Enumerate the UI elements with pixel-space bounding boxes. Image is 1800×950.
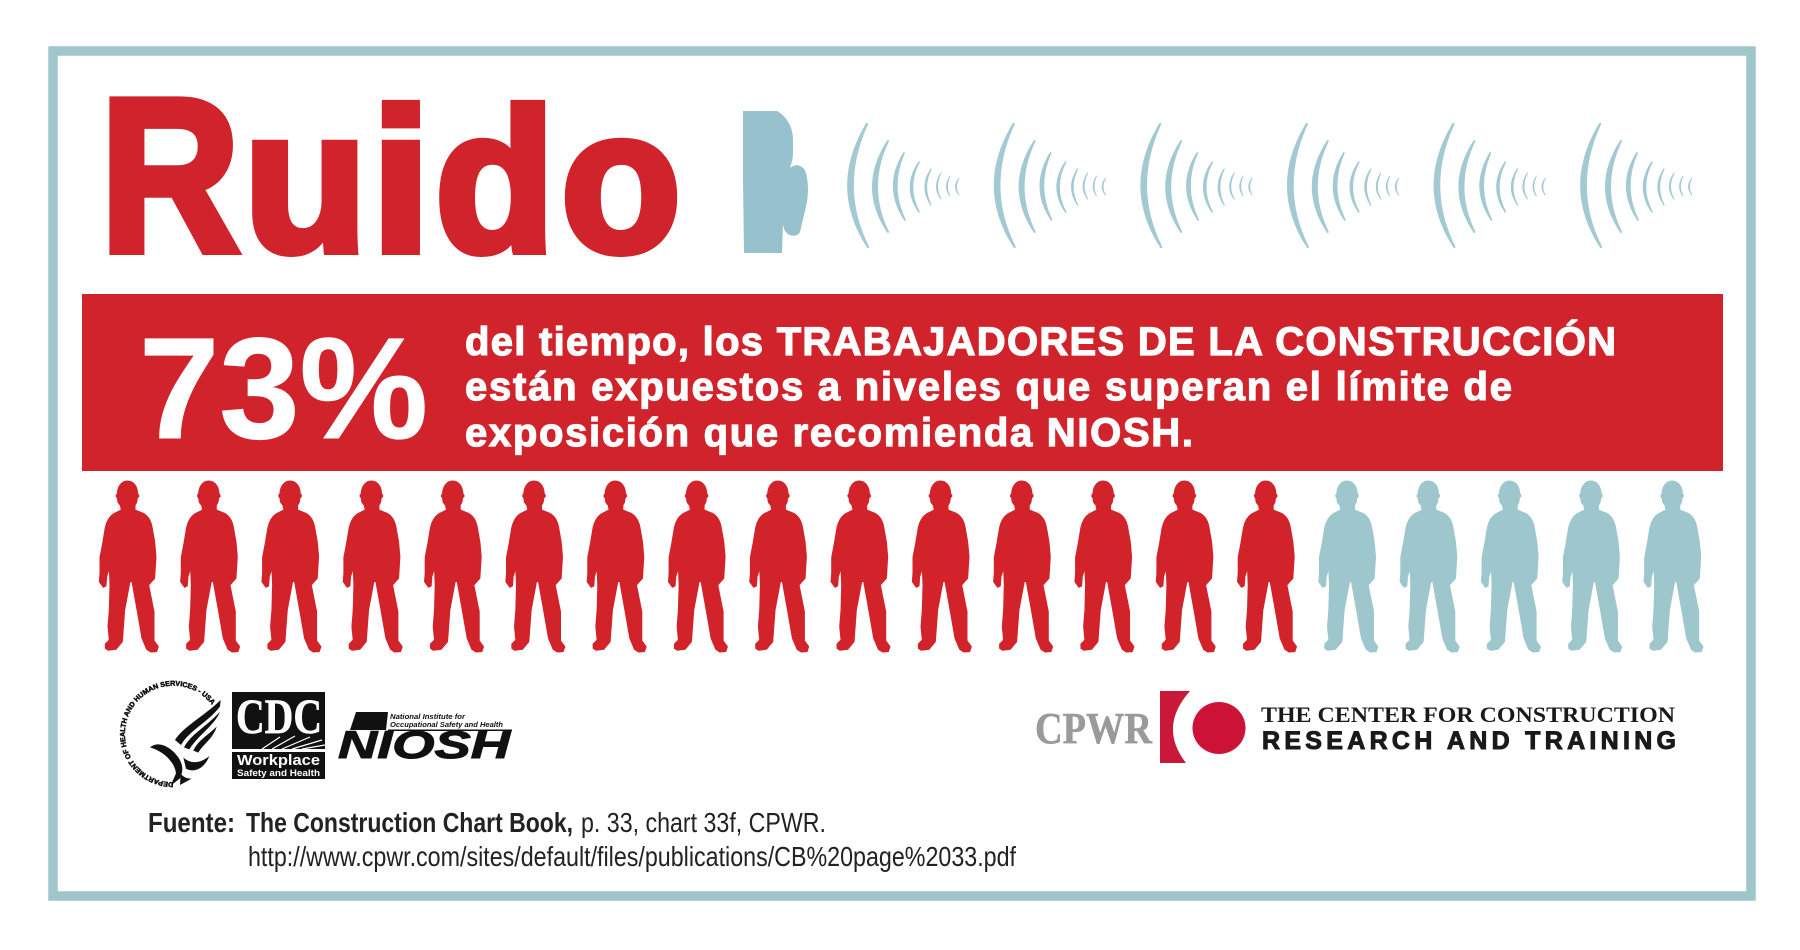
sound wave 4 bbox=[1288, 124, 1399, 247]
logo: HHS bbox=[120, 680, 221, 788]
CPWR name line 2: RESEARCH AND TRAINING bbox=[1262, 727, 1676, 755]
statistic description bbox=[465, 318, 1616, 455]
statistic description: del tiempo, los TRABAJADORES DE LA CONSTRUCCIÓN bbox=[465, 318, 1616, 364]
source text: The Construction Chart Book, bbox=[246, 807, 573, 838]
title: o bbox=[561, 68, 681, 295]
icon: ear profile bbox=[743, 111, 808, 253]
statistic description: están expuestos a niveles que superan el límite de bbox=[465, 365, 1512, 409]
sound wave 3 bbox=[1141, 124, 1252, 247]
sound wave 5 bbox=[1435, 124, 1545, 247]
statistic description: exposición que recomienda NIOSH. bbox=[465, 411, 1193, 455]
source text: Fuente: bbox=[148, 807, 235, 838]
sound wave 2 bbox=[995, 124, 1106, 247]
source text: http://www.cpwr.com/sites/default/files/publications/CB%20page%2033.pdf bbox=[248, 841, 1016, 872]
title: R bbox=[100, 54, 240, 298]
CPWR bracket bbox=[1160, 691, 1190, 763]
sound wave 6 bbox=[1581, 124, 1692, 247]
CDC letters: CDC bbox=[236, 688, 322, 744]
sound wave 1 bbox=[848, 124, 959, 247]
HHS eagle bbox=[150, 700, 221, 786]
CPWR circle bbox=[1192, 702, 1246, 754]
logo: CPWR bbox=[1035, 691, 1676, 763]
pictogram: 5 blue workers bbox=[1319, 481, 1703, 652]
title: d bbox=[435, 68, 555, 295]
NIOSH subtitle line 2: Occupational Safety and Health bbox=[390, 720, 503, 729]
NIOSH subtitle line 1: National Institute for bbox=[390, 712, 466, 721]
NIOSH wordmark: NIOSH bbox=[338, 724, 511, 767]
logo: NIOSH bbox=[338, 712, 512, 767]
pictogram: 15 red workers bbox=[99, 481, 1297, 652]
icon: sound waves bbox=[848, 124, 1692, 247]
CDC rays bbox=[262, 736, 325, 749]
HHS circular text: DEPARTMENT OF HEALTH AND HUMAN SERVICES - USA bbox=[120, 680, 215, 788]
CPWR name line 1: THE CENTER FOR CONSTRUCTION bbox=[1261, 702, 1675, 727]
CPWR wordmark: CPWR bbox=[1035, 704, 1153, 753]
Safety and Health label: Safety and Health bbox=[237, 768, 320, 778]
title: i bbox=[371, 68, 431, 295]
source text: p. 33, chart 33f, CPWR. bbox=[581, 807, 826, 838]
panel: red statistic band bbox=[82, 294, 1723, 471]
title: u bbox=[244, 68, 368, 295]
logo: CDC Workplace Safety and Health bbox=[232, 688, 325, 779]
statistic: 73%: 73% bbox=[139, 308, 428, 469]
Workplace label: Workplace bbox=[237, 752, 320, 769]
source text bbox=[148, 807, 1016, 872]
